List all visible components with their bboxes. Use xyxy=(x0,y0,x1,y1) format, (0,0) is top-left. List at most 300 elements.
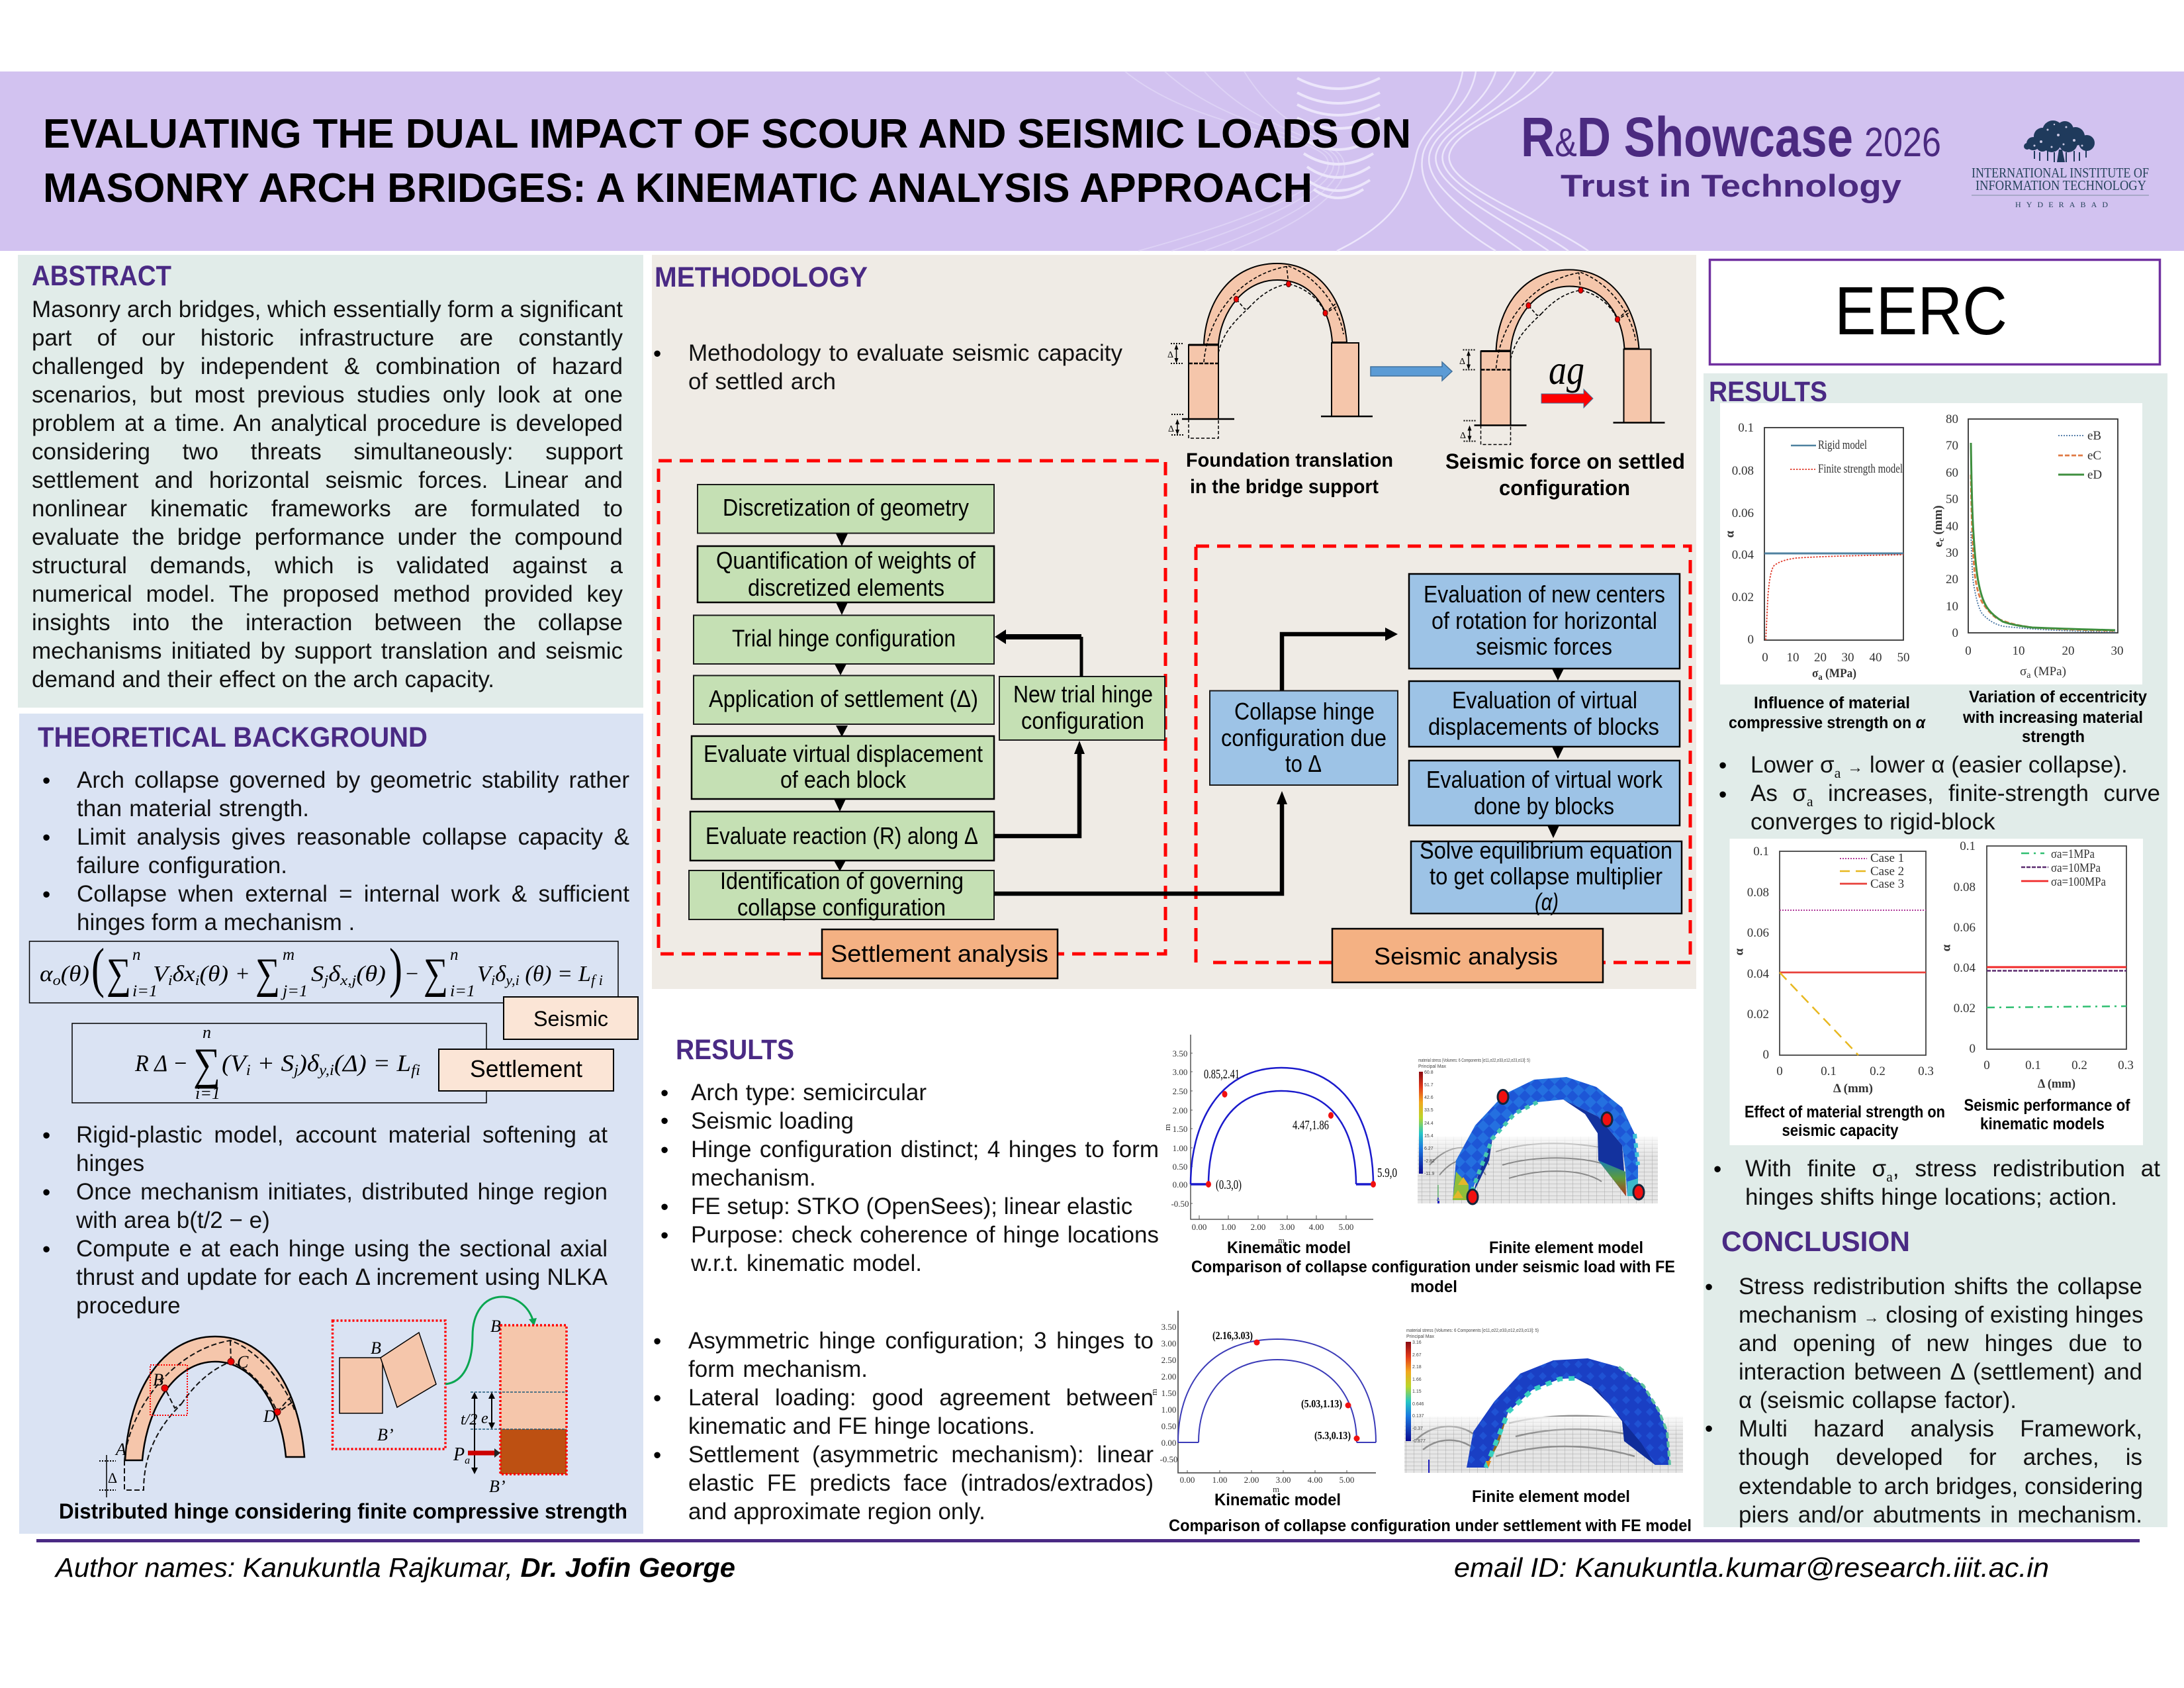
arrows: step connectors xyxy=(1547,669,1564,838)
figure: finite element model, settlement: 0.646 xyxy=(1412,1402,1424,1407)
chart: eccentricity: 20 xyxy=(1946,573,1958,586)
chart: material strength on seismic capacity: 0 xyxy=(1776,1064,1783,1078)
bullets: settlement results xyxy=(653,1327,1171,1532)
bullets: conclusion: • xyxy=(1705,1274,1713,1300)
diagram: seismic force arch: Δ xyxy=(1460,431,1466,441)
figure: finite element model, settlement: -0.37 xyxy=(1412,1427,1423,1431)
bullets: strength findings: Lower σa → lower α (easier collapse). xyxy=(1751,752,2128,781)
step: new trial hinge: configuration xyxy=(1021,707,1144,734)
equation: seismic: j=1 xyxy=(281,982,308,1000)
chart: seismic performance of kinematic models: σa=1MPa xyxy=(2051,847,2095,861)
chart: kinematic model, settlement xyxy=(1149,1311,1376,1494)
logo: IIIT Hyderabad: HYDERABAD xyxy=(2015,200,2108,209)
text block: abstract body: settlement and horizontal seismic forces. Linear and xyxy=(32,467,623,493)
step: new centers of rotation: of rotation for horizontal xyxy=(1432,607,1657,634)
bullets: settlement results: and approximate region only. xyxy=(688,1499,985,1524)
chart: kinematic model, seismic load: 2.00 xyxy=(1173,1105,1187,1115)
chart: material strength on seismic capacity: α xyxy=(1732,948,1746,955)
captions: second chart row: Seismic performance of xyxy=(1964,1096,2130,1115)
captions: seismic comparison: model xyxy=(1410,1278,1457,1296)
chart: eccentricity: 40 xyxy=(1946,520,1958,534)
bullets: distributed hinge: • xyxy=(42,1180,50,1205)
chart: material strength on seismic capacity: 0.1 xyxy=(1821,1064,1837,1078)
step: virtual displacements xyxy=(1409,681,1680,747)
text block: abstract body: structural demands, which is validated against a xyxy=(32,553,623,579)
chart: eccentricity: e xyxy=(1931,541,1945,547)
chart: kinematic model, settlement: -0.50 xyxy=(1160,1454,1178,1464)
step: virtual displacement: of each block xyxy=(780,766,907,793)
chart: kinematic model, settlement: (5.3,0.13) xyxy=(1314,1429,1351,1442)
step: application of settlement: Application of settlement (Δ) xyxy=(709,685,978,712)
icon: banyan tree xyxy=(2024,120,2095,162)
chart: kinematic model, seismic load: 0.00 xyxy=(1192,1222,1206,1232)
equation: seismic: ∑ xyxy=(255,950,280,998)
chart: seismic performance of kinematic models: Δ (mm) xyxy=(2038,1077,2075,1091)
step: new trial hinge xyxy=(999,677,1165,740)
figure: finite element model, settlement: 0.137 xyxy=(1412,1414,1424,1419)
bullets: settlement results: elastic FE predicts face (intrados/extrados) xyxy=(688,1470,1154,1496)
chart: influence of compressive strength: 10 xyxy=(1787,651,1799,665)
equation: seismic: i xyxy=(491,972,495,988)
bullets: collapse theory xyxy=(42,766,636,939)
bullets: seismic results: mechanism. xyxy=(691,1165,816,1191)
captions: second chart row: Effect of material strength on xyxy=(1745,1103,1945,1121)
figure: finite element model, settlement: 2.18 xyxy=(1412,1365,1422,1370)
panel: results (right) xyxy=(1704,373,2167,1530)
step: quantification xyxy=(698,546,994,602)
chart: eccentricity: 70 xyxy=(1946,439,1958,453)
figure: finite element model, seismic load: 60.8 xyxy=(1424,1070,1433,1075)
bullets: settlement results: Settlement (asymmetric mechanism): linear xyxy=(688,1442,1154,1468)
label: seismic analysis: Seismic analysis xyxy=(1374,943,1558,970)
heading: abstract: ABSTRACT xyxy=(32,260,171,292)
chart: seismic performance of kinematic models: 0.02 xyxy=(1954,1002,1976,1015)
equation: seismic: n xyxy=(132,946,140,964)
bullets: conclusion: α (seismic collapse factor). xyxy=(1739,1387,2017,1413)
chart: eccentricity: 30 xyxy=(2111,644,2123,658)
equation: seismic: ∑ xyxy=(424,950,448,998)
equation: seismic: i=1 xyxy=(450,982,475,1000)
bullets: conclusion: extendable to arch bridges, considering xyxy=(1739,1474,2143,1499)
figure: finite element model, seismic load: -11.9 xyxy=(1424,1172,1435,1176)
chart: eccentricity: 50 xyxy=(1946,492,1958,506)
header banner xyxy=(0,71,2184,251)
equation: settlement: y,i xyxy=(318,1062,334,1078)
text block: methodology bullet: Methodology to evaluate seismic capacity xyxy=(688,340,1122,366)
chart: seismic performance of kinematic models: σa=100MPa xyxy=(2051,875,2106,889)
equation: seismic: o xyxy=(53,972,61,988)
bullets: collapse theory: than material strength. xyxy=(77,796,309,821)
diagram: distributed hinge arch: Δ xyxy=(108,1470,117,1486)
chart: kinematic model, settlement: m xyxy=(1273,1484,1279,1494)
step: new centers of rotation: Evaluation of new centers xyxy=(1424,581,1665,608)
heading: conclusion: CONCLUSION xyxy=(1721,1226,1910,1258)
chart: kinematic model, settlement: 0.00 xyxy=(1180,1475,1195,1485)
captions: seismic comparison xyxy=(1191,1239,1675,1296)
chart: kinematic model, seismic load: 3.00 xyxy=(1173,1067,1187,1077)
bullets: collapse theory: Collapse when external = internal work & sufficient xyxy=(77,881,629,907)
text block: abstract body: numerical model. The proposed method provided key xyxy=(32,581,623,607)
chart background xyxy=(1720,403,2142,684)
captions: first chart row xyxy=(1729,688,2147,746)
chart: kinematic model, settlement: (2.16,3.03) xyxy=(1212,1329,1253,1342)
captions: first chart row: compressive strength on α xyxy=(1729,714,1926,732)
bullets: settlement results: • xyxy=(653,1329,661,1354)
chart: seismic performance of kinematic models: 0.06 xyxy=(1954,921,1976,935)
equation: settlement: i xyxy=(246,1062,251,1078)
bullets: collapse theory: • xyxy=(42,825,50,851)
label: settlement: Settlement xyxy=(470,1055,582,1082)
figure: finite element model, seismic load: 51.7 xyxy=(1424,1083,1433,1088)
text block: abstract body: evaluate the bridge performance under the compound xyxy=(32,524,623,550)
equation: seismic: f i xyxy=(591,972,603,988)
captions: first chart row: Variation of eccentricity xyxy=(1969,688,2147,706)
chart: kinematic model, seismic load: 4.47,1.86 xyxy=(1293,1118,1329,1133)
step: collapse hinge: configuration due xyxy=(1221,724,1387,751)
chart: influence of compressive strength: 0.06 xyxy=(1732,506,1754,520)
chart: influence of compressive strength: (MPa) xyxy=(1823,667,1856,680)
text block: abstract body: problem at a time. An analytical procedure is developed xyxy=(32,410,623,436)
bullets: settlement results: Lateral loading: good agreement between xyxy=(688,1385,1154,1411)
captions: second chart row: kinematic models xyxy=(1980,1115,2105,1133)
chart: influence of compressive strength: Rigid model xyxy=(1818,438,1867,452)
captions: first chart row: Influence of material xyxy=(1754,694,1910,712)
bullets: distributed hinge: thrust and update for each Δ increment using NLKA xyxy=(76,1264,608,1290)
title xyxy=(43,111,1411,211)
equation: seismic xyxy=(29,937,618,1003)
bullets: conclusion: Stress redistribution shifts the collapse xyxy=(1739,1274,2142,1299)
diagram: distributed hinge arch xyxy=(99,1336,304,1497)
bullets: conclusion: interaction between Δ (settlement) and xyxy=(1739,1359,2142,1385)
captions: settlement comparison: Finite element model xyxy=(1472,1487,1630,1506)
equation: seismic: (θ) xyxy=(356,962,386,986)
logo: R&D Showcase 2026 xyxy=(1521,106,1941,203)
chart: kinematic model, seismic load: -0.50 xyxy=(1171,1199,1189,1209)
bullets: finite strength finding: • xyxy=(1713,1156,1721,1182)
chart: influence of compressive strength: 0.1 xyxy=(1738,421,1754,435)
bullets: settlement results: • xyxy=(653,1385,661,1411)
chart: kinematic model, seismic load: 0.00 xyxy=(1173,1180,1187,1190)
chart: kinematic model, settlement: 1.00 xyxy=(1161,1405,1176,1415)
diagram: seismic force arch: Δ xyxy=(1459,357,1465,367)
figure: finite element model, settlement: 2.67 xyxy=(1412,1353,1422,1358)
figure: finite element model, settlement: -0.877 xyxy=(1412,1439,1426,1444)
bullets: collapse theory: failure configuration. xyxy=(77,853,287,878)
equation: seismic: α xyxy=(40,962,52,986)
diagram: foundation translation arch: Δ xyxy=(1167,350,1173,360)
arrow: blue process arrow xyxy=(1371,362,1452,381)
step: equilibrium: (α) xyxy=(1535,888,1559,915)
text block: abstract body: challenged by independent & combination of hazard xyxy=(32,353,623,379)
text block: abstract body: insights into the interaction between the collapse xyxy=(32,610,623,635)
figure: finite element model, settlement: 1.15 xyxy=(1412,1389,1422,1394)
bullets: collapse theory: • xyxy=(42,768,50,794)
text block: abstract body: demand and their effect on the arch capacity. xyxy=(32,667,494,692)
equation: seismic: i xyxy=(195,972,200,988)
chart: influence of compressive strength: a xyxy=(1818,673,1823,682)
bullets: seismic results: Hinge configuration distinct; 4 hinges to form xyxy=(691,1137,1159,1162)
chart: kinematic model, seismic load: (0.3,0) xyxy=(1216,1178,1242,1192)
heading: methodology: METHODOLOGY xyxy=(655,261,868,293)
diagram: stress block: t/2 xyxy=(461,1411,477,1429)
chart: kinematic model, seismic load: m xyxy=(1162,1124,1172,1131)
bullets: strength findings xyxy=(1719,751,2164,840)
equation: seismic: ) xyxy=(389,937,402,999)
step: reaction xyxy=(690,812,994,861)
step: virtual displacements: displacements of blocks xyxy=(1428,713,1659,740)
chart: kinematic model, seismic load: 0.50 xyxy=(1173,1162,1187,1172)
bullets: seismic results: • xyxy=(660,1194,668,1220)
chart: eccentricity: 10 xyxy=(2012,644,2025,658)
bullets: conclusion: • xyxy=(1705,1416,1713,1442)
chart: influence of compressive strength: 20 xyxy=(1814,651,1827,665)
bullets: distributed hinge: • xyxy=(42,1123,50,1149)
captions: first chart row: with increasing material xyxy=(1962,708,2143,727)
step: governing configuration xyxy=(689,867,994,921)
equation: settlement: n xyxy=(203,1023,211,1042)
logo: R&D Showcase 2026: 2026 xyxy=(1864,120,1941,165)
arrow: reaction to new trial xyxy=(994,741,1085,836)
chart: influence of compressive strength: 0 xyxy=(1747,633,1754,647)
step: reaction: Evaluate reaction (R) along Δ xyxy=(705,822,978,849)
bullets: distributed hinge: hinges xyxy=(76,1150,144,1176)
chart: influence of compressive strength: 40 xyxy=(1869,651,1882,665)
bullets: settlement results: form mechanism. xyxy=(688,1356,868,1382)
text block: abstract body: mechanisms initiated by support translation and seismic xyxy=(32,638,623,664)
flowchart: seismic analysis xyxy=(994,546,1690,982)
captions: arch diagrams xyxy=(1186,449,1685,500)
bullets: conclusion: piers and/or abutments in mechanism. xyxy=(1739,1502,2142,1528)
step: virtual work xyxy=(1409,761,1680,825)
title: EVALUATING THE DUAL IMPACT OF SCOUR AND SEISMIC LOADS ON xyxy=(43,111,1411,157)
chart: eccentricity: σ xyxy=(2020,665,2026,679)
bullets: settlement results: Asymmetric hinge configuration; 3 hinges to xyxy=(688,1328,1154,1354)
bullets: collapse theory: Arch collapse governed by geometric stability rather xyxy=(77,767,629,793)
captions: second chart row xyxy=(1745,1096,2130,1140)
step: discretization: Discretization of geometry xyxy=(723,494,969,521)
bullets: seismic results: • xyxy=(660,1080,668,1106)
diagram: stress block xyxy=(453,1317,567,1496)
equation: seismic: S xyxy=(311,962,322,986)
bullets: strength findings: • xyxy=(1719,753,1727,778)
chart background xyxy=(1730,839,2143,1145)
chart: influence of compressive strength: α xyxy=(1723,530,1737,538)
diagram: seismic force arch: ag xyxy=(1549,346,1584,393)
step: virtual displacement xyxy=(692,736,994,799)
step: virtual displacements: Evaluation of virtual xyxy=(1452,686,1637,714)
chart: kinematic model, settlement: 5.00 xyxy=(1340,1475,1354,1485)
bullets: seismic results: • xyxy=(660,1108,668,1134)
diagram: seismic force arch xyxy=(1459,270,1665,445)
panel: theoretical background xyxy=(19,714,643,1534)
diagram: stress block: P xyxy=(453,1444,465,1465)
caption: distributed hinge: Distributed hinge considering finite compressive strength xyxy=(59,1499,627,1523)
bullets: conclusion: Multi hazard analysis Framework, xyxy=(1739,1416,2142,1442)
bullets: settlement results: kinematic and FE hinge locations. xyxy=(688,1413,1035,1439)
diagram: stress block: e xyxy=(481,1410,488,1427)
captions: arch diagrams: Seismic force on settled xyxy=(1445,449,1685,473)
bullets: finite strength finding: hinges shifts hinge locations; action. xyxy=(1745,1184,2117,1210)
equation: seismic: − xyxy=(406,962,418,986)
chart: eccentricity: 0 xyxy=(1965,644,1972,658)
figure: finite element model, settlement xyxy=(1404,1329,1683,1473)
equation: seismic: ( xyxy=(91,937,105,999)
equation: settlement: (V xyxy=(222,1050,244,1076)
diagram: foundation translation arch: Δ xyxy=(1168,424,1174,434)
chart: eccentricity: eB xyxy=(2087,429,2101,443)
figure: finite element model, settlement: material stress (Volumes: 6 Components [σ11,σ22,σ33,σ12,σ23,σ13]: 5) xyxy=(1406,1329,1539,1333)
chart: kinematic model, seismic load: 5.9,0 xyxy=(1377,1166,1397,1180)
figure: finite element model, seismic load: 33.5 xyxy=(1424,1108,1433,1113)
chart: material strength on seismic capacity: Case 1 xyxy=(1870,851,1904,865)
chart: kinematic model, seismic load: 5.00 xyxy=(1339,1222,1353,1232)
equation: settlement: j xyxy=(292,1062,298,1078)
flowchart: settlement analysis xyxy=(659,461,1165,978)
equation: seismic: δx xyxy=(173,962,195,986)
equation: seismic: δ xyxy=(495,962,507,986)
step: new trial hinge: New trial hinge xyxy=(1013,680,1153,708)
chart: eccentricity: eD xyxy=(2087,468,2102,482)
arrows: step connectors xyxy=(834,534,848,871)
equation: seismic: ∑ xyxy=(107,950,131,998)
bullets: strength findings: As σa increases, finite-strength curve xyxy=(1751,780,2160,810)
equation: seismic: m xyxy=(283,946,295,964)
label: settlement analysis xyxy=(822,929,1058,978)
logo: IIIT Hyderabad: INTERNATIONAL INSTITUTE OF xyxy=(1972,165,2149,181)
chart: kinematic model, settlement: 4.00 xyxy=(1308,1475,1322,1485)
diagram: hinge rotation detail: B xyxy=(371,1338,381,1358)
figure: finite element model, seismic load: 15.4 xyxy=(1424,1134,1433,1139)
arrow: new trial loop xyxy=(995,630,1081,677)
label: settlement analysis: Settlement analysis xyxy=(831,940,1048,967)
step: governing configuration: collapse configuration xyxy=(737,894,946,921)
bullets: conclusion: though developed for arches, is xyxy=(1739,1444,2142,1470)
chart: material strength on seismic capacity: 0.3 xyxy=(1918,1064,1934,1078)
footer: email: email ID: Kanukuntla.kumar@research.iiit.ac.in xyxy=(1454,1552,2049,1583)
captions: settlement comparison xyxy=(1169,1487,1692,1535)
chart: material strength on seismic capacity: Δ (mm) xyxy=(1833,1082,1873,1096)
chart: eccentricity: 30 xyxy=(1946,546,1958,560)
text block: abstract body: nonlinear kinematic frameworks are formulated to xyxy=(32,496,623,522)
panel: methodology xyxy=(652,255,1696,989)
chart: kinematic model, settlement: 0.00 xyxy=(1161,1438,1176,1448)
chart: material strength on seismic capacity: 0.2 xyxy=(1870,1064,1886,1078)
chart: eccentricity: 60 xyxy=(1946,466,1958,480)
chart: kinematic model, settlement: m xyxy=(1149,1389,1159,1395)
figure: finite element model, seismic load: 6.27 xyxy=(1424,1147,1433,1151)
equation: settlement: i=1 xyxy=(195,1084,220,1103)
logo: R&D Showcase 2026: Trust in Technology xyxy=(1561,168,1901,203)
equation: seismic: (θ) xyxy=(61,962,89,986)
captions: second chart row: seismic capacity xyxy=(1782,1121,1899,1140)
step: trial hinge: Trial hinge configuration xyxy=(732,625,956,651)
chart: seismic performance of kinematic models xyxy=(1939,839,2134,1091)
panel: abstract xyxy=(18,255,643,708)
title: MASONRY ARCH BRIDGES: A KINEMATIC ANALYSIS APPROACH xyxy=(43,165,1312,211)
captions: settlement comparison: Comparison of collapse configuration under settlement with FE model xyxy=(1169,1517,1692,1535)
step: application of settlement xyxy=(694,675,994,724)
chart: kinematic model, settlement: 3.50 xyxy=(1161,1322,1176,1332)
label: settlement xyxy=(439,1049,614,1091)
equation: seismic: (θ) xyxy=(200,962,228,986)
chart: material strength on seismic capacity: 0 xyxy=(1763,1048,1769,1062)
bullets: collapse theory: • xyxy=(42,882,50,908)
equation: settlement: (Δ) = L xyxy=(334,1050,411,1076)
diagram: distributed hinge arch: B xyxy=(153,1370,163,1389)
label: seismic xyxy=(504,997,638,1039)
chart: material strength on seismic capacity: 0.1 xyxy=(1753,845,1769,859)
chart: seismic performance of kinematic models: 0.1 xyxy=(2025,1058,2041,1072)
diagram: distributed hinge arch: A xyxy=(114,1440,126,1459)
equation: seismic: i=1 xyxy=(132,982,158,1000)
bullets: strength findings: converges to rigid-block xyxy=(1751,809,1995,835)
text block: methodology bullet: • xyxy=(653,341,661,367)
chart: influence of compressive strength: 50 xyxy=(1897,651,1910,665)
step: new centers of rotation: seismic forces xyxy=(1476,633,1612,660)
equation: seismic: (θ) = L xyxy=(520,962,591,986)
chart: influence of compressive strength xyxy=(1723,421,1910,682)
diagram: hinge rotation detail: B’ xyxy=(377,1425,394,1444)
text block: abstract body: Masonry arch bridges, which essentially form a significant xyxy=(32,297,623,322)
equation: settlement: R Δ − xyxy=(134,1050,188,1076)
chart: kinematic model, seismic load: 1.50 xyxy=(1173,1124,1187,1134)
bullets: seismic results xyxy=(660,1078,1181,1284)
chart: eccentricity: (mm) xyxy=(1931,505,1945,538)
bullets: conclusion xyxy=(1705,1272,2152,1530)
figure: finite element model, seismic load: Principal Max xyxy=(1418,1064,1447,1069)
step: collapse hinge: Collapse hinge xyxy=(1234,698,1375,725)
diagram: stress block: B xyxy=(490,1317,501,1336)
step: virtual displacement: Evaluate virtual displacement xyxy=(704,740,983,767)
chart: kinematic model, seismic load: 1.00 xyxy=(1221,1222,1236,1232)
box: EERC: EERC xyxy=(1835,273,2007,349)
equation: seismic: y,i xyxy=(504,972,520,988)
chart: seismic performance of kinematic models: 0 xyxy=(1970,1042,1976,1056)
chart: kinematic model, settlement: 3.00 xyxy=(1161,1338,1176,1348)
bullets: distributed hinge: with area b(t/2 − e) xyxy=(76,1207,270,1233)
equation: settlement xyxy=(72,1023,486,1103)
text block: methodology bullet: of settled arch xyxy=(688,369,836,395)
figure: finite element model, seismic load: -2.82 xyxy=(1424,1159,1435,1164)
bullets: distributed hinge xyxy=(42,1121,615,1323)
text block: abstract body: part of our historic infrastructure are constantly xyxy=(32,325,623,351)
equation: seismic: n xyxy=(450,946,458,964)
chart: kinematic model, settlement: 1.00 xyxy=(1212,1475,1227,1485)
step: discretization xyxy=(698,485,994,534)
equation: settlement: fi xyxy=(411,1062,420,1078)
step: quantification: discretized elements xyxy=(748,574,944,601)
figure: finite element model, seismic load: 42.6 xyxy=(1424,1096,1433,1100)
logo: R&D Showcase 2026: R&D Showcase xyxy=(1521,106,1853,168)
diagram: distributed hinge arch: D xyxy=(263,1407,276,1426)
chart: influence of compressive strength: 0 xyxy=(1762,651,1768,665)
figure: finite element model, seismic load: 24.4 xyxy=(1424,1121,1433,1126)
chart: kinematic model, seismic load: 3.00 xyxy=(1280,1222,1295,1232)
diagram: hinge rotation detail xyxy=(332,1321,445,1449)
bullets: finite strength finding: With finite σa, stress redistribution at xyxy=(1745,1156,2160,1185)
chart: influence of compressive strength: σ xyxy=(1812,667,1819,680)
chart: eccentricity: 0 xyxy=(1952,626,1958,640)
chart: kinematic model, seismic load: 3.50 xyxy=(1173,1049,1187,1058)
chart: influence of compressive strength: 0.08 xyxy=(1732,464,1754,478)
label: seismic: Seismic xyxy=(533,1007,608,1031)
logo: IIIT Hyderabad xyxy=(1972,120,2149,209)
text block: abstract body xyxy=(32,295,627,699)
chart: seismic performance of kinematic models: 0.2 xyxy=(2071,1058,2087,1072)
chart: seismic performance of kinematic models: 0.3 xyxy=(2118,1058,2134,1072)
text block: abstract body: considering two threats simultaneously: support xyxy=(32,439,623,465)
chart: influence of compressive strength: 30 xyxy=(1841,651,1854,665)
